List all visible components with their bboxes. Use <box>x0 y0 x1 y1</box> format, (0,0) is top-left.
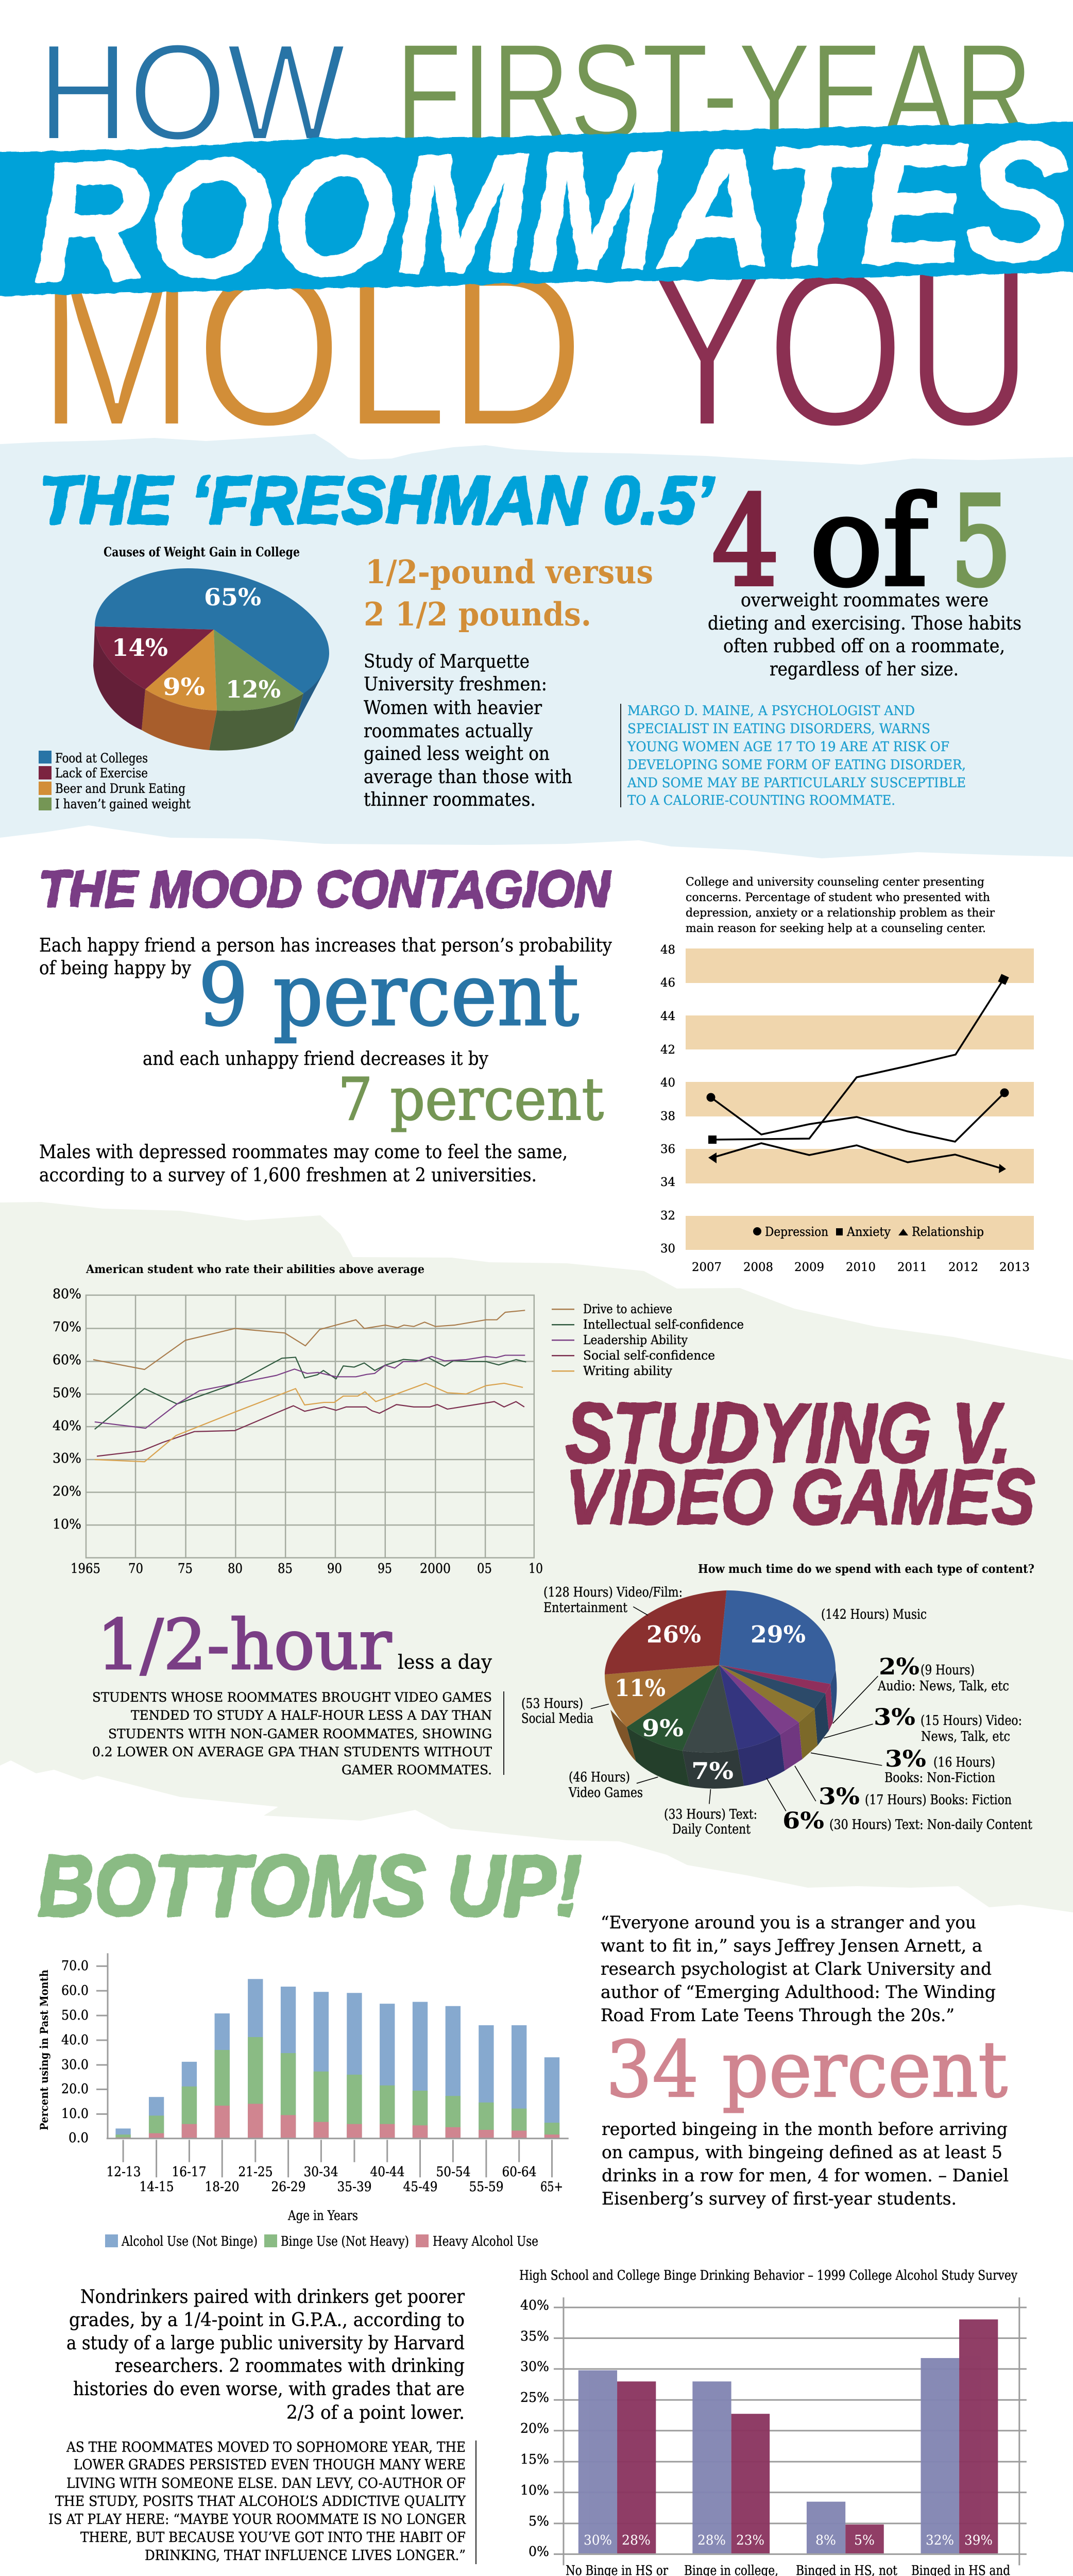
bar chart: alcohol use by age: 60.0 <box>61 1983 89 1998</box>
pie labels: content types: (17 Hours) Books: Fiction <box>865 1792 1012 1808</box>
section background: studying v. video games <box>0 1202 1073 1912</box>
stat: 4 of 5: 4 <box>712 470 779 614</box>
bar chart: alcohol use by age: 35-39 <box>337 2179 372 2195</box>
line chart: counseling center concerns: 34 <box>660 1176 675 1189</box>
stat: 9 percent: 9 percent <box>198 945 579 1045</box>
line chart: counseling center concerns: Relationship <box>912 1225 984 1239</box>
line chart: counseling center concerns: 30 <box>660 1242 675 1256</box>
line chart: abilities above average: 50% <box>53 1385 81 1401</box>
text block: bingeing definition: Eisenberg’s survey of first-year students. <box>602 2189 957 2209</box>
pie chart: causes of weight gain: 14% <box>112 634 168 662</box>
pie chart: causes of weight gain <box>93 568 329 751</box>
bar chart: binge drinking behavior: 5% <box>529 2514 549 2529</box>
legend: causes: Food at Colleges <box>55 751 148 766</box>
pie chart: time per content type: 26% <box>646 1621 701 1648</box>
pie labels: content types: (15 Hours) Video: <box>921 1713 1022 1728</box>
line chart: counseling center concerns: 2011 <box>897 1261 927 1274</box>
bar chart: binge drinking behavior: 0% <box>529 2544 549 2560</box>
heading: bottoms up: BOTTOMS UP! <box>38 1838 582 1934</box>
bar chart: alcohol use by age: 18-20 <box>205 2179 239 2195</box>
bar chart: alcohol use by age: Alcohol Use (Not Binge) <box>121 2234 258 2249</box>
line chart: counseling center concerns: 38 <box>660 1110 675 1123</box>
text block: nondrinkers paired with drinkers: Nondrinkers paired with drinkers get poorer <box>80 2286 465 2308</box>
line chart: abilities above average: 85 <box>278 1561 293 1577</box>
text block: video game roommates: 0.2 LOWER ON AVERAGE GPA THAN STUDENTS WITHOUT <box>92 1744 492 1759</box>
stat: half pound versus two and a half pounds <box>364 553 653 633</box>
text block: sophomore year: THE STUDY, POSITS THAT ALCOHOL’S ADDICTIVE QUALITY <box>55 2494 466 2510</box>
bar chart: alcohol use by age: 55-59 <box>469 2179 504 2195</box>
stat: 7 percent: 7 percent <box>338 1065 604 1133</box>
chart title: counseling center concerns <box>686 876 995 935</box>
text block: overweight roommates <box>708 590 1021 680</box>
stat: half hour less a day: less a day <box>398 1651 492 1673</box>
text block: depressed roommates: according to a survey of 1,600 freshmen at 2 universities. <box>39 1165 537 1186</box>
line chart: abilities above average: 30% <box>53 1451 81 1466</box>
text block: marquette study: Study of Marquette <box>364 651 530 672</box>
bar chart: alcohol use by age: Binge Use (Not Heavy) <box>281 2234 409 2249</box>
legend: causes: Beer and Drunk Eating <box>55 781 185 796</box>
bar chart: alcohol use by age: 0.0 <box>69 2130 89 2146</box>
pie labels: content types: 3% <box>874 1704 915 1731</box>
pie labels: content types: (46 Hours) <box>569 1770 630 1785</box>
text block: video game roommates: STUDENTS WITH NON-GAMER ROOMMATES, SHOWING <box>108 1726 492 1741</box>
bar chart: alcohol use by age: 70.0 <box>61 1958 89 1974</box>
pie chart: time per content type: 7% <box>691 1757 734 1785</box>
bar chart: binge drinking behavior: 39% <box>964 2533 993 2548</box>
pie labels: content types: 2% <box>879 1654 919 1680</box>
legend: abilities: Social self-confidence <box>583 1348 715 1363</box>
line chart: counseling center concerns: 36 <box>660 1143 675 1156</box>
stat: 4 of 5: 5 <box>950 470 1012 614</box>
legend: abilities: Leadership Ability <box>583 1333 688 1347</box>
line chart: abilities above average: 10% <box>53 1517 81 1532</box>
panel: studying v. video games <box>53 1263 1035 1837</box>
bar chart: alcohol use by age: 26-29 <box>271 2179 306 2195</box>
heading: freshman 0.5: THE ‘FRESHMAN 0.5’ <box>39 462 715 538</box>
pie labels: content types: (33 Hours) Text: <box>664 1807 757 1822</box>
chart title: counseling center concerns: concerns. Percentage of student who presented with <box>686 891 990 904</box>
text block: arnett quote: want to fit in,” says Jeffrey Jensen Arnett, a <box>601 1936 982 1956</box>
text block: nondrinkers paired with drinkers: grades, by a 1/4-point in G.P.A., according to <box>69 2310 465 2331</box>
bar chart: binge drinking behavior: 28% <box>622 2533 651 2548</box>
line chart: abilities above average: 20% <box>53 1484 81 1499</box>
callout: margo maine: TO A CALORIE-COUNTING ROOMMATE. <box>627 793 895 808</box>
text block: marquette study: average than those with <box>364 767 572 788</box>
line chart: counseling center concerns: 2007 <box>692 1261 722 1274</box>
bar chart: alcohol use by age <box>38 1953 569 2249</box>
bar chart: alcohol use by age: Age in Years <box>287 2208 358 2224</box>
line chart: abilities above average: 75 <box>178 1561 193 1577</box>
legend: causes <box>39 751 191 811</box>
pie labels: content types: Audio: News, Talk, etc <box>877 1679 1009 1694</box>
bar chart: alcohol use by age: 50-54 <box>436 2164 471 2180</box>
pie labels: content types: Entertainment <box>543 1600 627 1616</box>
stat: half pound versus two and a half pounds: 2 1/2 pounds. <box>364 595 591 633</box>
chart title: time per content type: How much time do we spend with each type of content? <box>698 1562 1034 1576</box>
text block: happy friend intro <box>39 935 612 979</box>
chart title: counseling center concerns: depression, anxiety or a relationship problem as their <box>686 907 995 920</box>
panel: bottoms up <box>38 1838 1027 2576</box>
bar chart: alcohol use by age: 50.0 <box>61 2008 89 2023</box>
line chart: counseling center concerns: 2012 <box>948 1261 978 1274</box>
text block: sophomore year: DRINKING, THAT INFLUENCE LIVES LONGER.” <box>145 2548 466 2564</box>
text block: sophomore year: IS AT PLAY HERE: “MAYBE YOUR ROOMMATE IS NO LONGER <box>48 2512 466 2528</box>
bar chart: alcohol use by age: 14-15 <box>139 2179 174 2195</box>
bar chart: alcohol use by age: 30.0 <box>61 2057 89 2073</box>
panel: the mood contagion <box>39 860 1034 1274</box>
bar chart: binge drinking behavior: 30% <box>584 2533 612 2548</box>
bar chart: binge drinking behavior: 10% <box>520 2483 549 2498</box>
bar chart: alcohol use by age: 30-34 <box>304 2164 338 2180</box>
text block: depressed roommates <box>39 1142 568 1186</box>
text block: unhappy friend: and each unhappy friend decreases it by <box>143 1048 489 1070</box>
text block: nondrinkers paired with drinkers <box>66 2286 465 2424</box>
legend: abilities <box>552 1302 744 1378</box>
text block: arnett quote: “Everyone around you is a stranger and you <box>601 1912 976 1933</box>
chart title: counseling center concerns: College and university counseling center presenting <box>686 876 984 889</box>
title line: how first-year <box>38 15 1033 169</box>
pie labels: content types: (30 Hours) Text: Non-daily Content <box>829 1817 1032 1833</box>
title <box>0 15 1073 473</box>
stat: half hour less a day: 1/2-hour <box>97 1605 392 1685</box>
bar chart: binge drinking behavior: 25% <box>520 2390 549 2405</box>
text block: nondrinkers paired with drinkers: researchers. 2 roommates with drinking <box>115 2355 465 2377</box>
text block: marquette study: gained less weight on <box>364 743 550 765</box>
callout: margo maine: DEVELOPING SOME FORM OF EATING DISORDER, <box>627 757 966 773</box>
line chart: counseling center concerns: Anxiety <box>846 1225 891 1239</box>
text block: sophomore year: THERE, BUT BECAUSE YOU’VE GOT INTO THE HABIT OF <box>80 2530 466 2546</box>
stat: half pound versus two and a half pounds: 1/2-pound versus <box>365 553 653 591</box>
stat: 34 percent: 34 percent <box>606 2025 1008 2115</box>
bar chart: binge drinking behavior: 30% <box>520 2359 549 2375</box>
line chart: counseling center concerns: 32 <box>660 1209 675 1223</box>
bar chart: binge drinking behavior: 32% <box>926 2533 954 2548</box>
bar chart: binge drinking behavior: 5% <box>854 2533 875 2548</box>
text block: sophomore year: LIVING WITH SOMEONE ELSE. DAN LEVY, CO-AUTHOR OF <box>66 2476 466 2492</box>
line chart: abilities above average: 60% <box>53 1352 81 1368</box>
line chart: counseling center concerns: 44 <box>660 1010 675 1023</box>
bar chart: alcohol use by age: 65+ <box>540 2179 563 2195</box>
legend: causes: Lack of Exercise <box>55 766 148 781</box>
pie labels: content types: (53 Hours) <box>521 1696 583 1711</box>
bar chart: alcohol use by age: 21-25 <box>238 2164 273 2180</box>
legend: causes: I haven’t gained weight <box>55 796 191 811</box>
line chart: abilities above average: 1965 <box>71 1561 100 1577</box>
text block: arnett quote <box>601 1912 996 2026</box>
text block: sophomore year: AS THE ROOMMATES MOVED TO SOPHOMORE YEAR, THE <box>66 2439 466 2455</box>
text block: marquette study: roommates actually <box>364 721 533 742</box>
text block: bingeing definition: on campus, with bingeing defined as at least 5 <box>602 2142 1002 2163</box>
line chart: counseling center concerns <box>660 943 1034 1274</box>
text block: video game roommates: STUDENTS WHOSE ROOMMATES BROUGHT VIDEO GAMES <box>92 1690 492 1705</box>
text block: nondrinkers paired with drinkers: a study of a large public university by Harvard <box>66 2333 465 2354</box>
pie chart: time per content type: 11% <box>615 1674 666 1702</box>
pie chart: causes of weight gain: 9% <box>163 673 205 701</box>
title line: mold you <box>38 223 1033 473</box>
legend: abilities: Intellectual self-confidence <box>583 1317 744 1332</box>
pie labels: content types: Daily Content <box>672 1822 751 1837</box>
pie chart: causes of weight gain: 12% <box>226 675 281 703</box>
text block: overweight roommates: dieting and exercising. Those habits <box>708 613 1021 634</box>
pie labels: content types: (9 Hours) <box>921 1663 975 1678</box>
bar chart: alcohol use by age: 16-17 <box>172 2164 206 2180</box>
line chart: abilities above average: 90 <box>327 1561 342 1577</box>
pie labels: content types: Books: Non-Fiction <box>884 1770 995 1786</box>
bar chart: alcohol use by age: 20.0 <box>61 2081 89 2097</box>
line chart: abilities above average: 70% <box>53 1319 81 1335</box>
bar chart: alcohol use by age: 40.0 <box>61 2032 89 2048</box>
text block: overweight roommates: regardless of her size. <box>770 659 959 680</box>
pie labels: content types: 3% <box>885 1746 926 1772</box>
section background: freshman 0.5 <box>0 434 1073 858</box>
text block: video game roommates: TENDED TO STUDY A HALF-HOUR LESS A DAY THAN <box>131 1708 492 1723</box>
legend: abilities: Drive to achieve <box>583 1302 672 1316</box>
pie chart: time per content type: 29% <box>751 1621 806 1648</box>
text block: marquette study: thinner roommates. <box>364 789 536 810</box>
bar chart: alcohol use by age: 10.0 <box>61 2106 89 2122</box>
pie chart: causes of weight gain: 65% <box>204 583 261 611</box>
line chart: counseling center concerns: 40 <box>660 1076 675 1090</box>
line chart: abilities above average: 10 <box>529 1561 543 1577</box>
text block: happy friend intro: Each happy friend a person has increases that person’s probability <box>39 935 612 956</box>
bar chart: alcohol use by age: 45-49 <box>403 2179 438 2195</box>
chart title: counseling center concerns: main reason for seeking help at a counseling center. <box>686 922 986 935</box>
line chart: abilities above average: 70 <box>128 1561 143 1577</box>
bar chart: binge drinking behavior <box>520 2297 1027 2576</box>
line chart: counseling center concerns: 46 <box>660 976 675 990</box>
bar chart: binge drinking behavior: 35% <box>520 2329 549 2344</box>
line chart: counseling center concerns: 2013 <box>999 1261 1030 1274</box>
text block: marquette study: University freshmen: <box>364 674 547 695</box>
line chart: abilities above average: 2000 <box>420 1561 451 1577</box>
text block: sophomore year <box>48 2439 476 2564</box>
pie chart: time per content type: 9% <box>642 1715 684 1742</box>
text block: nondrinkers paired with drinkers: 2/3 of a point lower. <box>286 2402 465 2424</box>
callout: margo maine: SPECIALIST IN EATING DISORDERS, WARNS <box>627 721 930 737</box>
pie labels: content types: (16 Hours) <box>933 1755 995 1770</box>
stat: 4 of 5: of <box>810 470 935 614</box>
bar chart: alcohol use by age: 12-13 <box>106 2164 141 2180</box>
pie labels: content types <box>521 1585 1032 1837</box>
text block: sophomore year: LOWER GRADES PERSISTED EVEN THOUGH MANY WERE <box>74 2457 466 2473</box>
text block: marquette study: Women with heavier <box>364 698 542 719</box>
text block: bingeing definition <box>602 2119 1009 2209</box>
line chart: counseling center concerns: 42 <box>660 1043 675 1057</box>
banner: torn blue strip <box>0 122 1073 296</box>
text block: arnett quote: Road From Late Teens Through the 20s.” <box>601 2005 955 2026</box>
callout: margo maine: MARGO D. MAINE, A PSYCHOLOGIST AND <box>627 703 915 719</box>
bar chart: binge drinking behavior: 40% <box>520 2298 549 2313</box>
legend: abilities: Writing ability <box>583 1364 672 1378</box>
line chart: abilities above average: 95 <box>378 1561 392 1577</box>
bar chart: alcohol use by age: 60-64 <box>502 2164 537 2180</box>
text block: video game roommates: GAMER ROOMMATES. <box>342 1762 492 1777</box>
bar chart: alcohol use by age: Percent using in Past Month <box>38 1970 50 2130</box>
text block: depressed roommates: Males with depressed roommates may come to feel the same, <box>39 1142 568 1163</box>
line chart: counseling center concerns: 2009 <box>794 1261 824 1274</box>
line chart: abilities above average: 40% <box>53 1418 81 1434</box>
pie labels: content types: (128 Hours) Video/Film: <box>543 1585 683 1600</box>
title line: how first-year: HOW <box>38 15 347 169</box>
text block: arnett quote: research psychologist at Clark University and <box>601 1959 992 1979</box>
text block: video game roommates <box>92 1690 504 1777</box>
pie labels: content types: News, Talk, etc <box>921 1729 1010 1744</box>
pie labels: content types: Video Games <box>568 1785 643 1801</box>
bar chart: binge drinking behavior: 20% <box>520 2421 549 2436</box>
stat: 4 of 5 <box>712 470 1012 614</box>
bar chart: binge drinking behavior: 15% <box>520 2452 549 2467</box>
callout: margo maine: AND SOME MAY BE PARTICULARLY SUSCEPTIBLE <box>627 775 966 791</box>
text block: nondrinkers paired with drinkers: histories do even worse, with grades that are <box>73 2379 465 2400</box>
line chart: counseling center concerns: 48 <box>660 943 675 957</box>
title line: mold you: MOLD <box>38 223 585 473</box>
text block: bingeing definition: reported bingeing in the month before arriving <box>602 2119 1008 2140</box>
text block: overweight roommates: often rubbed off on a roommate, <box>723 636 1005 657</box>
pie labels: content types: Social Media <box>521 1711 593 1726</box>
bar chart: binge drinking behavior: 23% <box>736 2533 764 2548</box>
chart title: abilities above average: American student who rate their abilities above average <box>86 1263 424 1276</box>
bar chart: alcohol use by age: 40-44 <box>370 2164 405 2180</box>
line chart: abilities above average <box>53 1286 543 1577</box>
callout: margo maine: YOUNG WOMEN AGE 17 TO 19 ARE AT RISK OF <box>627 739 949 755</box>
pie chart: time per content type <box>591 1590 882 1811</box>
bar chart: alcohol use by age: Heavy Alcohol Use <box>433 2234 538 2249</box>
panel: the freshman 0.5 <box>39 462 1021 811</box>
bar chart: binge drinking behavior: 28% <box>697 2533 726 2548</box>
line chart: abilities above average: 80 <box>228 1561 243 1577</box>
text block: overweight roommates: overweight roommates were <box>741 590 989 611</box>
line chart: counseling center concerns: Depression <box>765 1225 828 1239</box>
text block: marquette study <box>364 651 572 810</box>
heading: mood contagion: THE MOOD CONTAGION <box>39 860 611 918</box>
text block: bingeing definition: drinks in a row for men, 4 for women. – Daniel <box>602 2165 1009 2186</box>
bar chart: binge drinking behavior: 8% <box>815 2533 836 2548</box>
heading: studying v. video games <box>566 1385 1035 1540</box>
text block: happy friend intro: of being happy by <box>39 958 192 979</box>
pie labels: content types: 6% <box>782 1808 824 1834</box>
pie labels: content types: 3% <box>819 1784 860 1810</box>
line chart: abilities above average: 80% <box>53 1286 81 1302</box>
line chart: counseling center concerns: 2010 <box>846 1261 876 1274</box>
callout: margo maine <box>620 703 966 808</box>
line chart: abilities above average: 05 <box>477 1561 492 1577</box>
text block: arnett quote: author of “Emerging Adulthood: The Winding <box>601 1982 996 2003</box>
pie labels: content types: (142 Hours) Music <box>821 1607 927 1622</box>
line chart: counseling center concerns: 2008 <box>743 1261 773 1274</box>
chart title: causes of weight gain: Causes of Weight Gain in College <box>104 545 300 560</box>
